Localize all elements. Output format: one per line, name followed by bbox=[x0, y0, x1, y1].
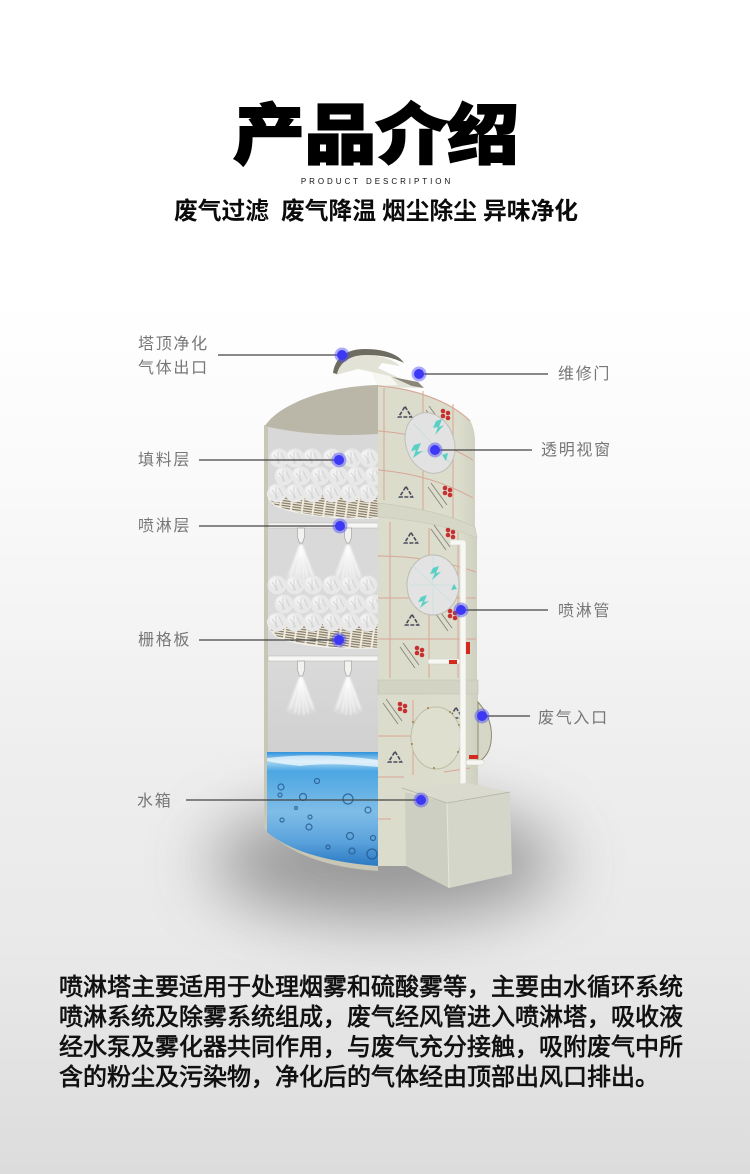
label: 水箱: 水箱 bbox=[137, 792, 172, 810]
label: 维修门: 维修门 bbox=[558, 365, 611, 383]
tower diagram bbox=[138, 335, 609, 958]
label: 喷淋管: 喷淋管 bbox=[558, 602, 611, 620]
water tank box bbox=[402, 783, 512, 888]
title: 产品介绍 bbox=[233, 99, 519, 172]
floor shadow bbox=[210, 807, 560, 917]
english subtitle: PRODUCT DESCRIPTION bbox=[301, 177, 453, 186]
label: 维修门 bbox=[412, 365, 611, 383]
label: 水箱 bbox=[137, 792, 428, 810]
description paragraph: 含的粉尘及污染物，净化后的气体经由顶部出风口排出。 bbox=[59, 1064, 659, 1091]
description paragraph: 经水泵及雾化器共同作用，与废气充分接触，吸附废气中所 bbox=[59, 1034, 683, 1061]
label: 废气入口 bbox=[474, 708, 609, 727]
label: 喷淋层 bbox=[138, 517, 348, 535]
description paragraph bbox=[59, 974, 683, 1091]
logo marks bbox=[383, 406, 462, 762]
label: 透明视窗 bbox=[428, 441, 612, 459]
label: 废气入口: 废气入口 bbox=[538, 709, 609, 727]
spray pipe upper bbox=[268, 523, 378, 585]
gas inlet pipe bbox=[478, 702, 491, 762]
inspection window upper bbox=[397, 406, 463, 480]
label: 喷淋层: 喷淋层 bbox=[138, 517, 191, 535]
label: 塔顶净化气体出口 bbox=[138, 335, 350, 377]
tower cutaway interior bbox=[264, 385, 384, 872]
label: 透明视窗: 透明视窗 bbox=[541, 441, 612, 459]
water tank contents bbox=[267, 752, 378, 872]
interior contents bbox=[267, 448, 384, 872]
feature tagline: 废气过滤 废气降温 烟尘除尘 异味净化 bbox=[174, 198, 578, 225]
packing layer upper bbox=[268, 448, 384, 502]
description paragraph: 喷淋系统及除雾系统组成，废气经风管进入喷淋塔，吸收液 bbox=[59, 1004, 683, 1031]
band lower bbox=[378, 680, 478, 694]
spray pipe exterior bbox=[428, 540, 484, 785]
top outlet pipe bbox=[333, 349, 424, 388]
label: 喷淋管 bbox=[454, 602, 611, 620]
grid lines bbox=[378, 386, 476, 819]
description paragraph: 喷淋塔主要适用于处理烟雾和硫酸雾等，主要由水循环系统 bbox=[59, 974, 683, 1001]
label: 栅格板: 栅格板 bbox=[138, 631, 191, 649]
label: 填料层: 填料层 bbox=[138, 451, 191, 469]
label: 填料层 bbox=[138, 451, 346, 469]
grating plate lower bbox=[267, 620, 378, 648]
label: 栅格板 bbox=[138, 631, 346, 649]
band upper bbox=[378, 503, 477, 538]
inspection window middle bbox=[407, 555, 459, 615]
flange lower bbox=[411, 707, 461, 769]
label: 塔顶净化气体出口: 塔顶净化 bbox=[138, 335, 209, 353]
label: 塔顶净化气体出口: 气体出口 bbox=[138, 359, 209, 377]
tower shell exterior bbox=[378, 385, 478, 866]
grating plate upper bbox=[267, 492, 378, 518]
spray pipe lower bbox=[268, 656, 378, 717]
packing layer lower bbox=[268, 576, 384, 632]
dome underside bbox=[265, 385, 378, 435]
